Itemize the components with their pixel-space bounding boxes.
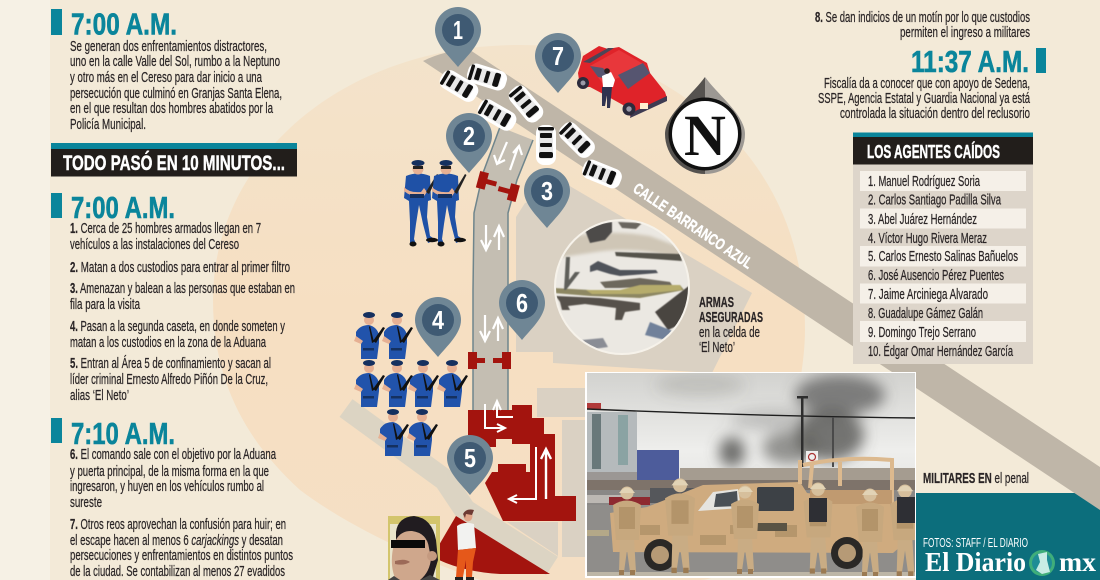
section: first 7:00 A.M.: Se generan dos enfrentamientos distractores, (70, 39, 267, 55)
panel: los agentes caídos: 3. Abel Juárez Hernández (868, 212, 977, 228)
section: first 7:00 A.M.: en el que resultan dos hombres abatidos por la (70, 101, 274, 117)
section: second 7:00 A.M.: 5. Entran al Área 5 de confinamiento y sacan al (70, 355, 271, 372)
checkpoint gates (468, 171, 520, 369)
section: 7:10 A.M.: 7:10 A.M. (71, 416, 175, 451)
map pin 7: 7 (552, 41, 564, 71)
photo caption: militares: MILITARES EN el penal (923, 471, 1029, 487)
cars (437, 62, 624, 191)
panel: los agentes caídos: 6. José Ausencio Pérez Puentes (868, 268, 1004, 284)
icon: north compass: N (684, 103, 726, 168)
panel: los agentes caídos: 4. Víctor Hugo Rivera Meraz (868, 231, 987, 247)
road: calle Barranco Azul (423, 50, 1100, 510)
section: first 7:00 A.M.: uno en la calle Valle del Sol, rumbo a la Neptuno (70, 54, 280, 70)
section: first 7:00 A.M. (51, 6, 282, 133)
section: second 7:00 A.M.: fila para la visita (70, 297, 141, 313)
credits and logo (923, 535, 1097, 577)
icon: north compass (665, 77, 745, 174)
banner: todo pasó en 10 minutos (51, 143, 297, 176)
panel: los agentes caídos: 2. Carlos Santiago Padilla Silva (868, 192, 1002, 208)
map pin 4: 4 (432, 305, 444, 335)
section: second 7:00 A.M.: 7:00 A.M. (71, 190, 175, 225)
section: 7:10 A.M. (51, 416, 293, 580)
section: 7:10 A.M.: sureste (70, 495, 102, 511)
map pin 5: 5 (464, 443, 476, 473)
panel: los agentes caídos: 9. Domingo Trejo Serrano (868, 325, 976, 341)
credits panel teal (916, 493, 1100, 580)
map pin 1 (435, 7, 481, 67)
peach area behind map (213, 45, 805, 580)
section: second 7:00 A.M. (51, 190, 295, 404)
weapons caption (699, 295, 763, 356)
section: second 7:00 A.M.: 3. Amenazan y balean a las personas que estaban en (70, 281, 295, 297)
weapons caption: ARMAS (699, 295, 734, 311)
panel: los agentes caídos (853, 132, 1033, 364)
map buildings blocks (507, 185, 752, 557)
section: second 7:00 A.M.: líder criminal Ernesto Alfredo Piñón De la Cruz, (70, 372, 268, 388)
map pin 7 (535, 33, 581, 93)
map pin 1: 1 (453, 15, 463, 45)
road label: CALLE BARRANCO AZUL (630, 180, 755, 273)
credits and logo: El Diario (925, 547, 1026, 577)
section: second 7:00 A.M.: 2. Matan a dos custodios para entrar al primer filtro (70, 260, 290, 276)
map pin 6 (499, 280, 545, 340)
police group middle (354, 312, 468, 456)
map pin 3 (524, 168, 570, 228)
panel: los agentes caídos: 8. Guadalupe Gámez Galán (868, 306, 983, 322)
section: 7:10 A.M.: 6. El comando sale con el objetivo por la Aduana (70, 447, 277, 463)
photo: seized weapons (554, 219, 690, 355)
icon: prisoner figure (455, 510, 476, 580)
icon: red car with person (577, 46, 667, 118)
map pin 3: 3 (541, 176, 553, 206)
panel: los agentes caídos: 5. Carlos Ernesto Salinas Bañuelos (868, 249, 1018, 265)
weapons caption: en la celda de (699, 325, 760, 341)
lower secondary road (346, 408, 552, 566)
panel: los agentes caídos: 10. Édgar Omar Hernández García (868, 343, 1014, 360)
banner: todo pasó en 10 minutos: TODO PASÓ EN 10 MINUTOS... (63, 151, 285, 175)
credits and logo: FOTOS: STAFF / EL DIARIO (923, 535, 1028, 550)
panel: los agentes caídos: LOS AGENTES CAÍDOS (867, 141, 1000, 162)
section: 11:37 A.M. (818, 44, 1046, 122)
section: 7:10 A.M.: y puerta principal, de la misma forma en la que (70, 464, 269, 480)
section: first 7:00 A.M.: y otro más en el Cereso para dar inicio a una (70, 70, 263, 86)
road arrows (480, 142, 522, 341)
map pin 2: 2 (463, 121, 475, 151)
prison building (468, 405, 576, 521)
section: 11:37 A.M.: 11:37 A.M. (911, 44, 1029, 79)
panel: los agentes caídos: 7. Jaime Arciniega Alvarado (868, 287, 988, 303)
map pin 6: 6 (516, 288, 528, 318)
soldiers (613, 486, 641, 575)
map pin 4 (415, 297, 461, 357)
item 8: permiten el ingreso a militares (900, 25, 1030, 41)
section: first 7:00 A.M.: Policía Municipal. (70, 117, 146, 133)
photo: El Neto (388, 516, 440, 580)
route arrows in building (485, 401, 551, 503)
section: 7:10 A.M.: de la ciudad. Se contabilizan al menos 27 evadidos (70, 564, 285, 580)
weapons caption: ASEGURADAS (699, 310, 763, 326)
section: second 7:00 A.M.: alias ‘El Neto’ (70, 388, 129, 404)
photo: soldiers and truck (585, 372, 920, 578)
panel: los agentes caídos: 1. Manuel Rodríguez Soria (868, 174, 981, 190)
section: second 7:00 A.M.: vehículos a las instalaciones del Cereso (70, 237, 239, 253)
section: 7:10 A.M.: 7. Otros reos aprovechan la confusión para huir; en (70, 517, 286, 533)
map pin 5 (447, 435, 493, 495)
item 8 (815, 10, 1030, 41)
side road (473, 127, 533, 412)
police group top (404, 160, 466, 246)
map pin 2 (446, 113, 492, 173)
section: second 7:00 A.M.: 1. Cerca de 25 hombres armados llegan en 7 (70, 221, 261, 237)
credits and logo: mx (1059, 547, 1097, 577)
section: 7:10 A.M.: persecuciones y enfrentamientos en distintos puntos (70, 548, 293, 564)
weapons caption: ‘El Neto’ (699, 340, 735, 356)
section: first 7:00 A.M.: 7:00 A.M. (71, 6, 177, 42)
section: 7:10 A.M.: el escape hacen al menos 6 carjackings y desatan (70, 533, 283, 549)
red fan courtyard (439, 516, 550, 574)
section: 7:10 A.M.: ingresaron, y huyen en los vehículos rumbo al (70, 479, 264, 495)
truck (610, 482, 900, 553)
section: first 7:00 A.M.: persecución que culminó en Granjas Santa Elena, (70, 86, 282, 102)
section: second 7:00 A.M.: 4. Pasan a la segunda caseta, en donde someten y (70, 319, 285, 335)
section: second 7:00 A.M.: matan a los custodios en la zona de la Aduana (70, 335, 267, 351)
